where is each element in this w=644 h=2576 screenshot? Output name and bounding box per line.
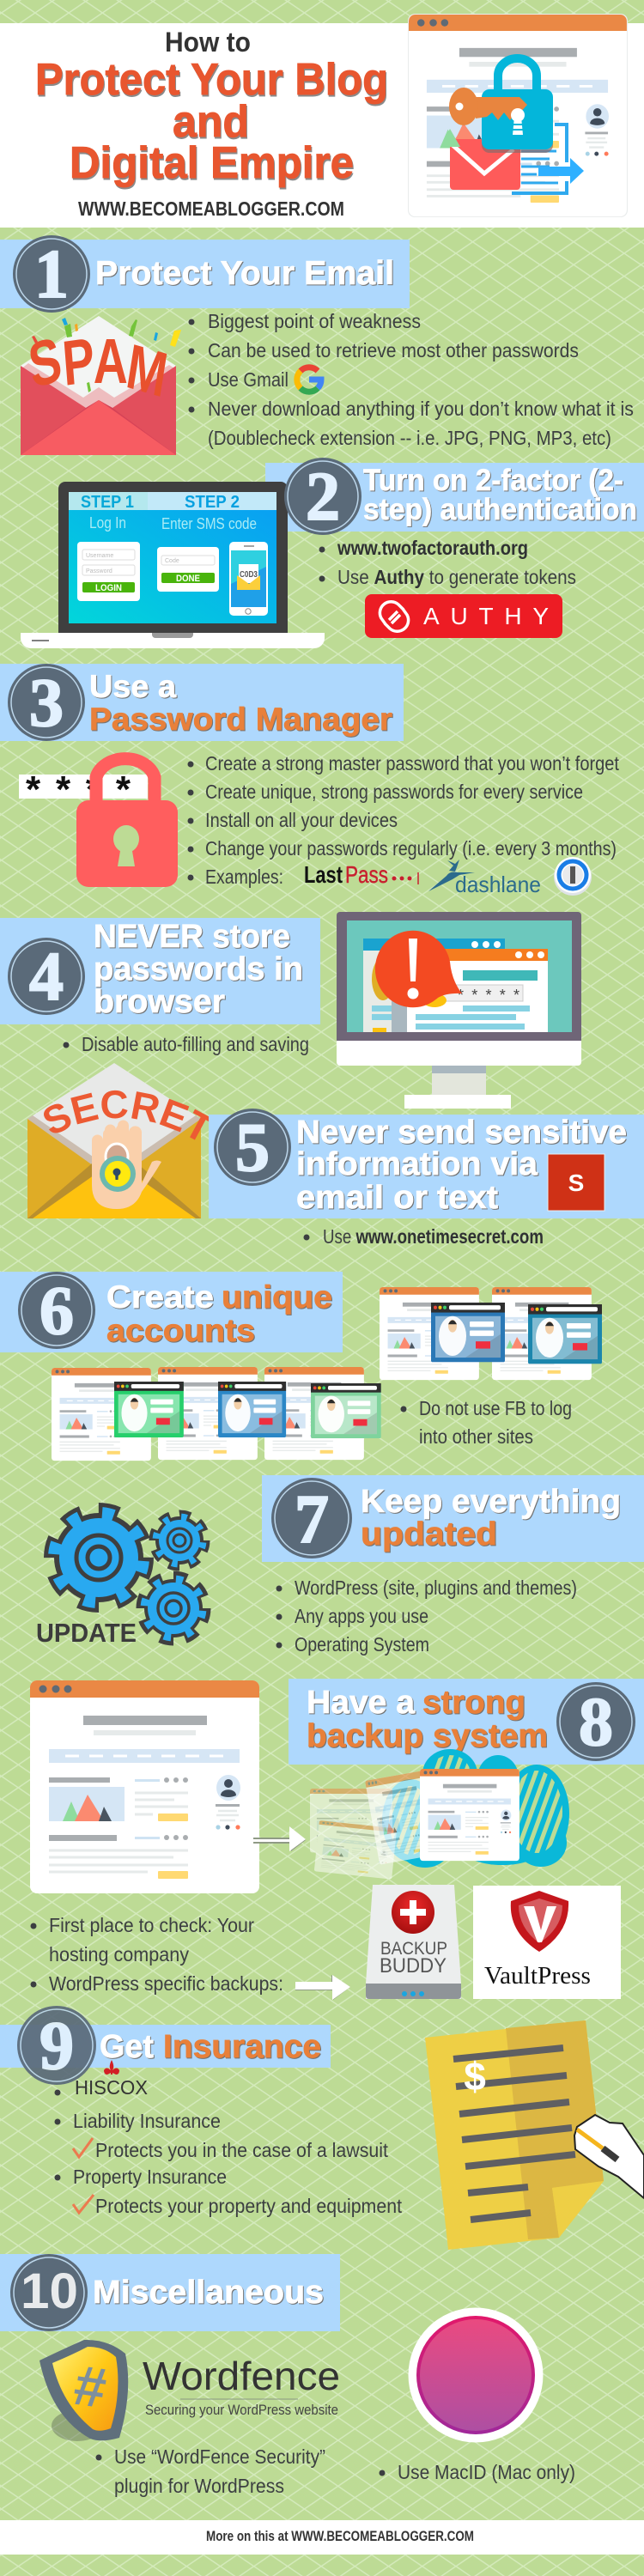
bullet 6 [400,1397,572,1448]
logo: hiscox [55,2060,148,2099]
heading 5: information via [296,1146,538,1182]
heading 5: Never send sensitive [296,1115,627,1151]
heading 5: email or text [296,1180,498,1216]
heading band 10 [0,2254,340,2331]
bullets 2: Use Authy to generate tokens [337,566,576,588]
title: Digital Empire [70,138,354,188]
heading 8: strong [422,1685,526,1721]
illustration: monitor with alert [337,912,581,1109]
heading 6 [106,1279,332,1348]
logo: wordfence: Wordfence [143,2354,340,2398]
illustration: backup cloud [310,1749,569,1880]
heading 4 [94,919,303,1020]
heading band 8 [289,1679,644,1765]
section 7: keep everything updated [36,1475,644,1656]
title [35,27,388,188]
heading 8: Have a [307,1685,416,1721]
section 10: miscellaneous [0,2254,575,2497]
icon: password field: **** [26,769,131,811]
title: How to [165,27,251,58]
illustration: laptop with two steps: C0D3 [240,570,258,580]
bullets 3: Examples: [205,866,283,888]
illustration: laptop with two steps: DONE [176,574,200,584]
heading band 7 [262,1475,644,1562]
illustration: laptop with two steps: Log In [89,514,126,532]
illustration: website card [30,1680,259,1893]
number badge 4: 4 [29,939,64,1015]
heading 7: Keep everything [361,1484,621,1520]
illustration: laptop with two steps: Password [86,568,112,574]
logo: dashlane: dashlane [455,872,541,897]
section 5: never send sensitive information [27,1063,644,1248]
heading 9: Insurance [163,2029,321,2065]
bullets 8 [31,1914,283,1995]
number badge 1 [13,235,90,313]
bullets 7: Any apps you use [295,1605,428,1627]
icon: spam envelope [21,316,181,455]
illustration: laptop with two steps: STEP 1 [81,493,134,512]
bullet wordfence: Use “WordFence Security” [114,2445,325,2468]
number badge 7: 7 [295,1482,329,1558]
icon: spam envelope: SPAM [24,323,172,410]
footer: More on this at WWW.BECOMEABLOGGER.COM [206,2528,474,2544]
icon: gears [50,1509,206,1641]
arrow to backups [253,1826,306,1851]
section 8: backup system [30,1679,644,2000]
number badge 5: 5 [235,1110,270,1186]
bullet 5: Use www.onetimesecret.com [323,1225,544,1248]
logo: wordfence: # [70,2353,110,2420]
bullets 9: Protects your property and equipment [95,2195,403,2217]
heading 2: step) authentication [363,493,637,526]
illustration: lower account windows [52,1367,381,1461]
heading 9 [100,2029,321,2065]
logo: authy: AUTHY [423,603,549,629]
site url: WWW.BECOMEABLOGGER.COM [78,197,344,220]
number badge 5 [214,1109,291,1186]
update label: UPDATE [36,1618,137,1648]
bullets 9: Property Insurance [73,2166,227,2188]
logo: backupbuddy: BUDDY [380,1954,447,1978]
bullets 3: Install on all your devices [205,809,398,831]
bullet 4: Disable auto-filling and saving [82,1033,309,1055]
heading band 9 [0,2025,331,2068]
bullets 9 [55,2110,403,2217]
heading 8: backup system [307,1718,548,1754]
bullets 1 [189,310,634,449]
footer [0,2520,644,2555]
heading band 5 [209,1115,644,1218]
number badge 9: 9 [39,2008,74,2084]
number badge 7 [271,1478,352,1558]
logo: onetimesecret S: S [568,1170,584,1196]
heading 6: unique [222,1279,332,1315]
logo: 1password [554,857,592,896]
illustration: laptop with two steps: LOGIN [95,583,122,593]
logo: dashlane [428,860,541,897]
bullets 7: WordPress (site, plugins and themes) [295,1577,577,1599]
logo: backupbuddy [366,1885,461,1999]
section 4: never store passwords [0,912,581,1109]
illustration: upper account windows [380,1287,602,1380]
number badge 4 [8,938,85,1015]
illustration: monitor with alert: ***** [458,987,519,1004]
bullets 9: Liability Insurance [73,2110,221,2132]
illustration: contract with hand [425,2020,644,2250]
illustration: laptop with two steps: Username [86,553,113,559]
heading 3 [89,669,392,737]
bullets 2: www.twofactorauth.org [337,537,528,559]
icon: google G [297,368,321,392]
heading 3: Use a [89,669,176,704]
illustration: laptop with two steps [21,482,325,648]
heading 3: Password Manager [89,702,392,737]
logo: lastpass: Pass [345,861,388,888]
number badge 3: 3 [29,665,64,741]
section 2: two factor authentication [21,458,644,648]
heading 6: Create [106,1279,214,1315]
number badge 8 [556,1682,635,1761]
heading 7 [361,1484,621,1552]
title: and [173,97,249,147]
bullets 3: Create unique, strong passwords for every service [205,781,583,803]
bullets 8: WordPress specific backups: [49,1972,283,1995]
number badge 10: 10 [21,2263,78,2319]
bullet wordfence [96,2445,325,2497]
bullets 2 [319,537,576,588]
heading 9: Get [100,2029,154,2065]
bullets 3 [187,752,620,888]
bullets 7: Operating System [295,1633,429,1656]
number badge 6 [18,1272,95,1349]
heading 8 [307,1685,548,1754]
logo: vaultpress: VaultPress [484,1962,591,1990]
logo: wordfence: Securing your WordPress website [145,2402,338,2418]
bullets 8: First place to check: Your [49,1914,254,1936]
number badge 2: 2 [306,459,340,535]
logo: backupbuddy: BACKUP [380,1939,447,1959]
bullet 6: into other sites [419,1425,533,1448]
section 3: password manager [0,664,620,897]
section 6: unique accounts [0,1272,602,1461]
logo: vaultpress [473,1886,621,1999]
bullet macid: Use MacID (Mac only) [398,2461,575,2483]
illustration: secret envelope with hand [27,1063,209,1218]
heading 6: accounts [106,1313,255,1348]
section 9: get insurance [0,2006,644,2250]
logo: onetimesecret S [548,1154,605,1211]
bullets 9: Protects you in the case of a lawsuit [95,2139,389,2161]
logo: wordfence [39,2340,340,2441]
bullets 1: Use Gmail [208,368,289,391]
heading 1: Protect Your Email [95,255,394,292]
section 1: protect your email [0,235,634,455]
number badge 6: 6 [39,1273,74,1349]
heading 7: updated [361,1516,497,1552]
illustration: contract with hand: $ [464,2054,486,2099]
heading band 2 [265,463,644,532]
bullets 8: hosting company [49,1943,189,1965]
bullet wordfence: plugin for WordPress [114,2475,284,2497]
heading 2 [363,464,637,526]
logo: hiscox: HISCOX [75,2076,148,2099]
logo: lastpass: Last [304,861,343,888]
heading 4: passwords in [94,951,303,987]
heading 2: Turn on 2-factor (2- [363,464,623,497]
arrow to plugins [295,1975,350,2000]
bullets 7 [276,1577,577,1656]
illustration: laptop with two steps: Code [165,558,179,564]
logo: authy [365,594,562,638]
illustration: secret envelope with hand: SECRET [44,1091,209,1140]
number badge 8: 8 [579,1685,613,1760]
logo: lastpass [304,861,418,888]
illustration: laptop with two steps: Enter SMS code [161,515,257,532]
heading band 1 [0,240,410,308]
heading 10: Miscellaneous [93,2275,324,2311]
bullets 1: Can be used to retrieve most other passwords [208,339,579,361]
icon: browser with lock, key and envelope [408,14,628,217]
heading band 4 [0,918,320,1024]
number badge 2 [284,458,361,535]
heading band 6 [0,1272,343,1352]
title: Protect Your Blog [35,55,388,105]
header band [0,14,644,228]
bullet 6: Do not use FB to log [419,1397,572,1419]
icon: red padlock [76,759,178,887]
illustration: laptop with two steps: STEP 2 [185,493,240,512]
heading 5 [296,1115,627,1216]
heading 4: browser [94,984,225,1020]
bullets 1: Biggest point of weakness [208,310,421,332]
heading 4: NEVER store [94,919,290,955]
number badge 1: 1 [34,237,69,313]
number badge 10 [10,2254,88,2331]
heading band 3 [0,664,404,741]
number badge 3 [8,664,85,741]
icon: macid circle [409,2308,543,2442]
number badge 9 [17,2006,96,2085]
